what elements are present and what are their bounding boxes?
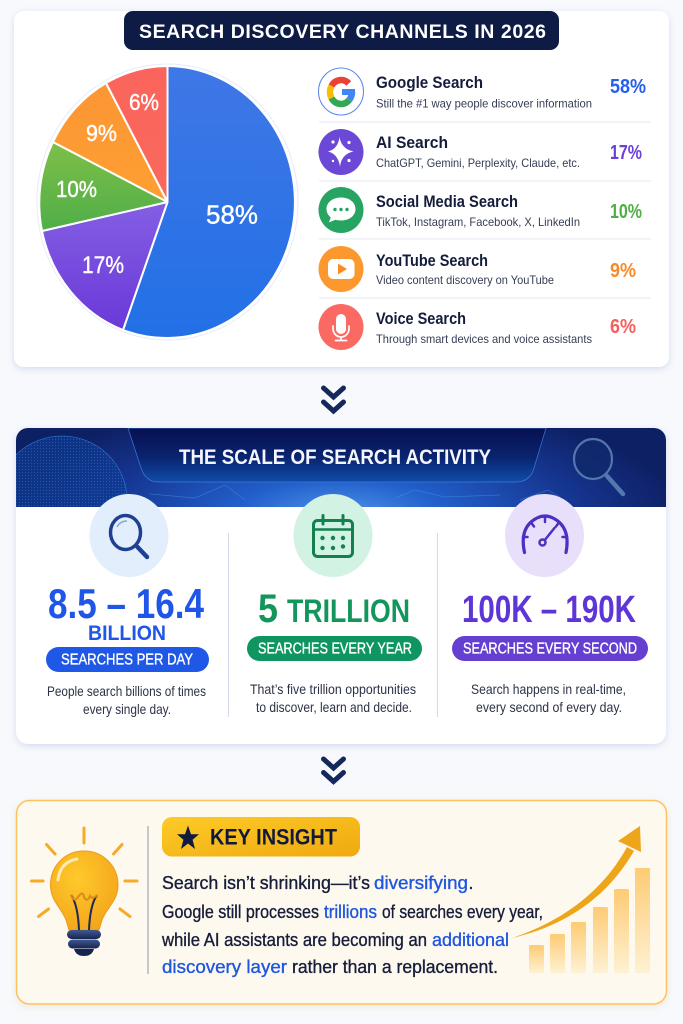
pie chart xyxy=(37,64,298,340)
row: Google Search: Google Search xyxy=(376,74,483,92)
insight text: while AI assistants are becoming an xyxy=(161,930,427,950)
stat: searches every year: TRILLION xyxy=(287,593,410,629)
icon: light bulb xyxy=(32,828,137,956)
stat: searches per day: BILLION xyxy=(88,622,166,645)
stat: searches every second: every second of every day. xyxy=(476,699,622,715)
icon: star xyxy=(177,826,199,849)
pill: searches per day xyxy=(46,647,209,672)
insight text xyxy=(161,873,543,977)
stat: searches every year: That’s five trillion opportunities xyxy=(250,681,416,697)
pill: searches every second xyxy=(452,636,648,661)
title: search discovery channels: SEARCH DISCOVERY CHANNELS IN 2026 xyxy=(139,21,546,43)
pill: searches every year xyxy=(247,636,422,661)
arrow: down chevrons xyxy=(324,759,344,782)
row: AI Search xyxy=(318,129,642,175)
row: Voice Search xyxy=(318,304,636,350)
icon: magnifier xyxy=(90,494,168,577)
row: Google Search: Still the #1 way people discover information xyxy=(376,96,592,110)
insight text: trillions xyxy=(324,902,377,922)
stat: searches every second xyxy=(452,494,648,715)
icon: Google xyxy=(318,68,364,115)
pie chart: 6% xyxy=(129,89,159,115)
stat: searches every year: 5 xyxy=(258,587,278,631)
globe xyxy=(16,436,128,507)
header banner xyxy=(16,428,666,507)
stat: searches every year xyxy=(247,494,422,715)
row: YouTube Search: Video content discovery on YouTube xyxy=(376,273,554,287)
row: Social Media Search: 10% xyxy=(610,201,642,223)
chart: rising bars with arrow xyxy=(512,826,650,973)
heading: key insight xyxy=(162,817,360,856)
stat: searches every year: to discover, learn and decide. xyxy=(256,699,412,715)
insight text: discovery layer xyxy=(162,957,287,977)
panel: key insight xyxy=(16,800,666,1004)
row: Social Media Search: TikTok, Instagram, Facebook, X, LinkedIn xyxy=(376,215,580,229)
pie chart: 9% xyxy=(86,120,117,146)
stat: searches per day: every single day. xyxy=(83,701,171,717)
row: Social Media Search: Social Media Search xyxy=(376,193,518,211)
panel: the scale of search activity xyxy=(0,428,666,744)
pill: searches per day: SEARCHES PER DAY xyxy=(61,652,193,668)
row: Social Media Search xyxy=(318,187,642,233)
icon: video play xyxy=(318,246,364,292)
pie chart: 58% xyxy=(206,200,258,230)
pie chart: 10% xyxy=(56,176,97,202)
insight text: rather than a replacement. xyxy=(292,957,498,977)
insight text: of searches every year, xyxy=(382,902,543,922)
pill: searches every second: SEARCHES EVERY SECOND xyxy=(463,640,637,658)
stat: searches every second: 100K – 190K xyxy=(462,589,636,631)
stat: searches per day: 8.5 – 16.4 xyxy=(48,580,205,627)
row: AI Search: 17% xyxy=(610,142,642,164)
icon: faint magnifier xyxy=(574,439,623,494)
heading: key insight: KEY INSIGHT xyxy=(210,824,337,850)
row: AI Search: AI Search xyxy=(376,134,448,152)
row: AI Search: ChatGPT, Gemini, Perplexity, Claude, etc. xyxy=(376,156,580,170)
panel: search discovery channels xyxy=(14,11,669,367)
row: Voice Search: 6% xyxy=(610,316,636,338)
stat: searches per day: People search billions of times xyxy=(47,683,206,699)
title: search discovery channels xyxy=(124,11,559,50)
stat: searches every second: Search happens in real-time, xyxy=(471,681,626,697)
row: Google Search: 58% xyxy=(610,76,646,98)
title: scale of search activity: THE SCALE OF SEARCH ACTIVITY xyxy=(179,446,491,469)
icon: AI sparkle xyxy=(318,129,364,175)
insight text: additional xyxy=(432,930,509,950)
icon: microphone xyxy=(318,304,364,350)
icon: speedometer xyxy=(505,494,584,577)
insight text: . xyxy=(468,873,474,893)
stat: searches per day xyxy=(46,494,209,717)
insight text: Google still processes xyxy=(162,902,319,922)
row: YouTube Search: 9% xyxy=(610,260,636,282)
row: Google Search xyxy=(318,68,646,115)
row: Voice Search: Voice Search xyxy=(376,310,466,328)
row: Voice Search: Through smart devices and voice assistants xyxy=(376,332,592,346)
icon: chat bubble xyxy=(318,187,364,233)
pie chart: 17% xyxy=(82,252,124,279)
pill: searches every year: SEARCHES EVERY YEAR xyxy=(258,640,412,658)
insight text: diversifying xyxy=(374,873,468,893)
icon: calendar xyxy=(294,494,372,577)
insight text: Search isn’t shrinking—it’s xyxy=(162,873,370,893)
row: YouTube Search xyxy=(318,246,636,292)
arrow: down chevrons xyxy=(324,388,344,411)
row: YouTube Search: YouTube Search xyxy=(376,252,488,270)
